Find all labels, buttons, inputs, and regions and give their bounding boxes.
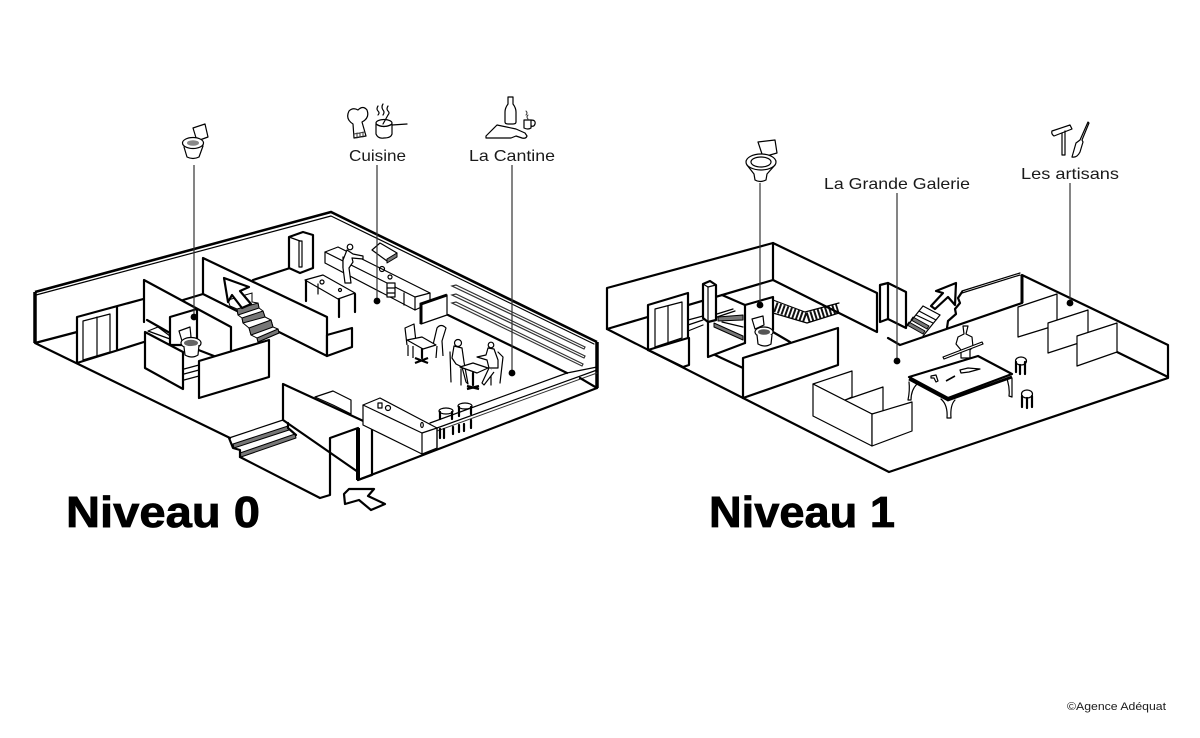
elevator bbox=[648, 293, 689, 367]
icon: bottle, board and mug bbox=[486, 97, 535, 138]
title: Niveau 0: Niveau 0 bbox=[66, 488, 260, 537]
empty table and chairs bbox=[405, 324, 446, 363]
icon: toilet large bbox=[746, 140, 777, 182]
gallery door bbox=[880, 283, 906, 328]
kitchen counter bbox=[325, 247, 430, 310]
label: La Cantine: La Cantine bbox=[469, 148, 555, 165]
credit: ©Agence Adéquat bbox=[1067, 701, 1166, 713]
column bbox=[703, 281, 716, 322]
entrance wall and door bbox=[240, 384, 372, 498]
icon: toilet on plan bbox=[752, 316, 773, 346]
leader line: Les artisans bbox=[1067, 183, 1073, 306]
panel: Niveau 0 floor plan bbox=[35, 165, 597, 510]
leader line: La Cantine bbox=[509, 165, 515, 376]
icon: mallet and chisel bbox=[1052, 122, 1089, 157]
icon: pot bbox=[376, 104, 407, 138]
spiral stairs bbox=[688, 309, 743, 340]
outer walls and floor bbox=[607, 243, 1168, 472]
diners at table bbox=[450, 340, 503, 389]
elevator bbox=[77, 298, 147, 363]
person behind table bbox=[943, 326, 983, 359]
front partition bbox=[743, 328, 838, 398]
panel: Niveau 1 floor plan bbox=[607, 183, 1168, 472]
bar counter bbox=[363, 398, 437, 454]
icon: toilet on plan bbox=[179, 327, 201, 357]
floor stripes bbox=[452, 285, 585, 366]
stair railing bbox=[773, 300, 839, 323]
person cooking bbox=[343, 244, 363, 283]
wall screen bbox=[421, 295, 447, 324]
work table bbox=[908, 356, 1012, 418]
kitchen table bbox=[305, 275, 355, 317]
fridge bbox=[289, 232, 313, 273]
bar ledge bbox=[358, 367, 597, 480]
small cabinet behind wall bbox=[315, 391, 351, 414]
icon: toilet bbox=[182, 124, 208, 158]
arrow up bbox=[931, 283, 956, 309]
stairs going up bbox=[228, 293, 279, 342]
panels: Les artisans bbox=[1018, 294, 1117, 366]
leader line: La Grande Galerie bbox=[894, 193, 900, 364]
bar stools bbox=[439, 403, 472, 438]
label: La Grande Galerie: La Grande Galerie bbox=[824, 176, 970, 193]
entrance stairs bbox=[229, 420, 296, 457]
arrow up bbox=[224, 278, 251, 308]
leader line: Cuisine bbox=[374, 165, 380, 304]
title: Niveau 1: Niveau 1 bbox=[709, 488, 895, 537]
entrance arrow bbox=[344, 489, 385, 510]
stairs bbox=[907, 306, 940, 336]
cooker hood bbox=[372, 243, 397, 263]
outer walls and floor bbox=[35, 212, 597, 438]
stools bbox=[1016, 357, 1032, 408]
toilet block walls bbox=[708, 295, 790, 368]
leader line: toilets bbox=[191, 165, 197, 320]
toilet block bbox=[144, 280, 269, 398]
large partition wall bbox=[183, 258, 352, 356]
leader line: toilets bbox=[757, 183, 763, 308]
label: Les artisans: Les artisans bbox=[1021, 166, 1119, 183]
label: Cuisine: Cuisine bbox=[349, 148, 406, 165]
icon: chef hat bbox=[348, 108, 368, 138]
bench bbox=[813, 371, 912, 446]
